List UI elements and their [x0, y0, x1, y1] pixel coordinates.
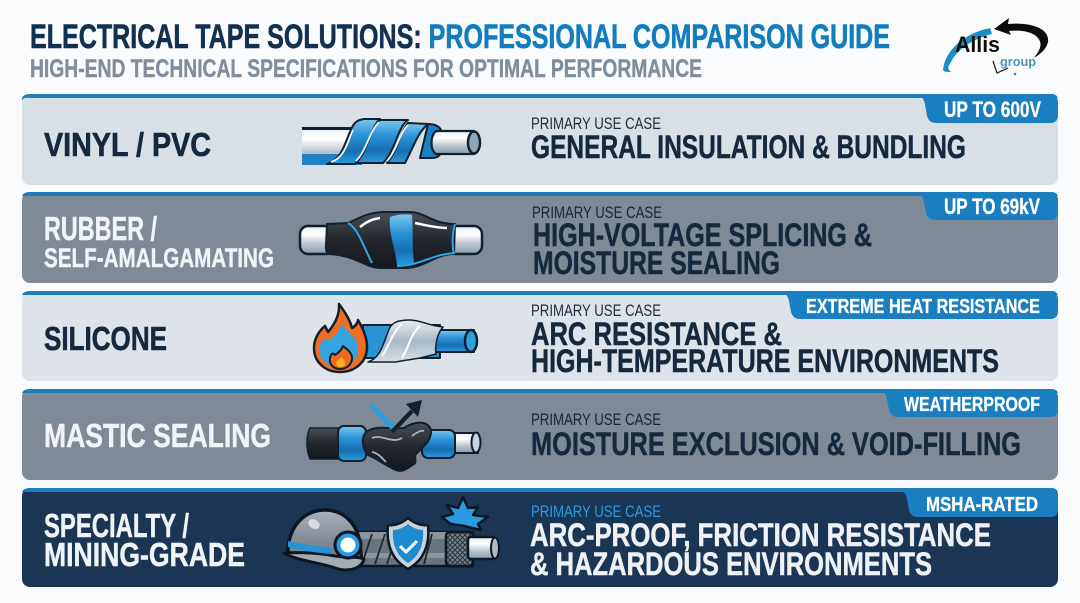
icon: mastic sealed cable — [307, 400, 480, 471]
material name: SILICONE — [44, 320, 167, 357]
logo: Allis group: group — [1000, 54, 1036, 69]
helmet — [284, 510, 364, 570]
icon: tape-wrapped cable — [302, 119, 480, 165]
badge: weatherproof — [880, 390, 1058, 417]
logo: Allis group — [943, 18, 1048, 75]
primary use case value: & HAZARDOUS ENVIRONMENTS — [530, 546, 932, 582]
material name: VINYL / PVC — [44, 126, 211, 163]
badge: extreme heat resistance — [782, 292, 1058, 319]
panel: Mastic Sealing — [22, 389, 1058, 480]
spark — [442, 497, 488, 530]
primary use case label: PRIMARY USE CASE — [531, 502, 661, 521]
badge: up to 600V — [918, 95, 1058, 123]
primary use case value — [530, 517, 991, 582]
badge: up to 600V: UP TO 600V — [944, 97, 1041, 122]
material name: RUBBER / — [44, 210, 157, 247]
shield — [388, 518, 428, 569]
material name: MASTIC SEALING — [44, 417, 271, 454]
panel: Specialty / Mining-Grade — [22, 488, 1058, 587]
icon: rubber splice — [300, 212, 482, 268]
primary use case label: PRIMARY USE CASE — [531, 410, 661, 429]
tape wrap 1 — [327, 119, 380, 164]
logo: Allis group: Allis — [955, 32, 1000, 57]
badge: MSHA-rated: MSHA-RATED — [926, 494, 1038, 516]
subtitle: HIGH-END TECHNICAL SPECIFICATIONS FOR OPTIMAL PERFORMANCE — [30, 55, 702, 83]
badge: MSHA-rated — [900, 490, 1058, 517]
panel: Silicone — [22, 291, 1058, 381]
material name — [44, 507, 245, 573]
icon: flame and silicone tape — [314, 304, 477, 372]
material name: SELF-AMALGAMATING — [44, 243, 274, 273]
panel: Vinyl / PVC — [22, 94, 1058, 185]
primary use case value: HIGH-VOLTAGE SPLICING & — [533, 217, 872, 253]
material name: MINING-GRADE — [44, 536, 245, 573]
badge: up to 69kV: UP TO 69kV — [944, 194, 1040, 219]
tape wrap 2 — [355, 120, 408, 163]
panel: Rubber / Self-Amalgamating — [22, 192, 1058, 283]
material name: SPECIALTY / — [44, 507, 189, 544]
badge: weatherproof: WEATHERPROOF — [904, 394, 1040, 416]
icon: miner helmet, braided cable and shield — [284, 497, 499, 570]
primary use case label: PRIMARY USE CASE — [532, 203, 662, 222]
primary use case value: ARC RESISTANCE & — [531, 316, 782, 352]
primary use case label: PRIMARY USE CASE — [531, 301, 661, 320]
tape wrap 3 — [387, 123, 428, 163]
primary use case label: PRIMARY USE CASE — [531, 114, 661, 133]
primary use case value — [531, 316, 999, 379]
primary use case value — [533, 217, 872, 281]
title: ELECTRICAL TAPE SOLUTIONS: PROFESSIONAL COMPARISON GUIDE — [30, 18, 890, 56]
primary use case value: MOISTURE SEALING — [533, 245, 780, 281]
material name — [44, 210, 274, 273]
